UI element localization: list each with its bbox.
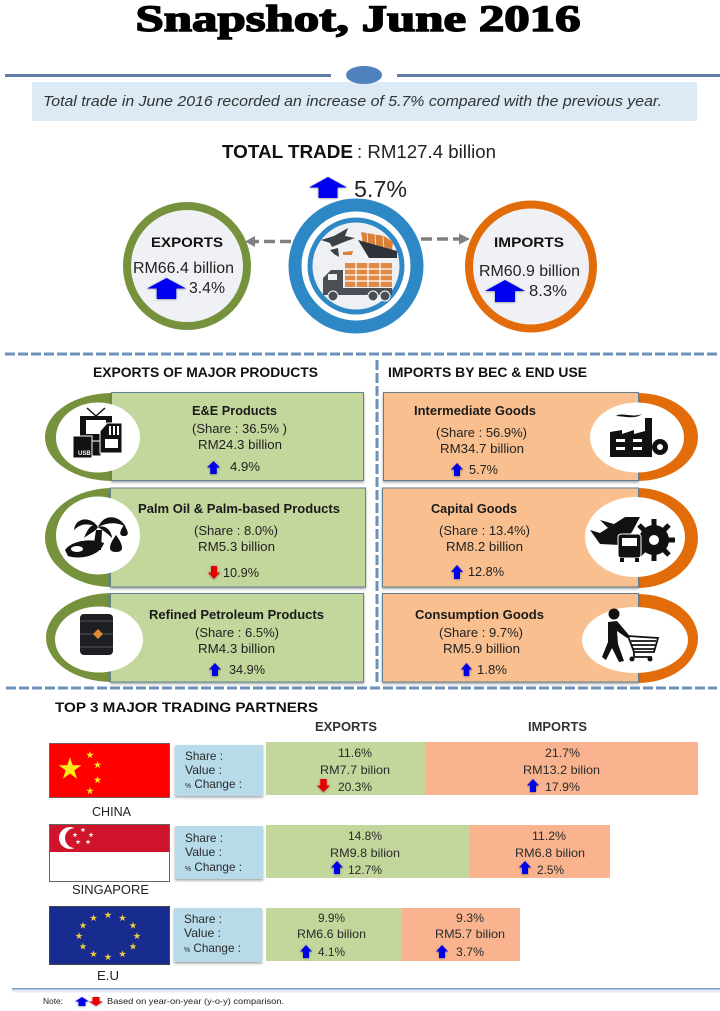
- bar: exports: RM7.7 bilion: [320, 763, 390, 777]
- panel: refined petroleum products: RM4.3 billion: [198, 642, 275, 656]
- note: Note:: [43, 996, 63, 1006]
- note: [43, 996, 284, 1006]
- bar: exports: 20.3%: [338, 780, 372, 794]
- bar: imports: 21.7%: [545, 746, 580, 760]
- bar: exports: 11.6%: [338, 746, 372, 760]
- flag: Singapore: [50, 824, 170, 882]
- exports circle: EXPORTS: [151, 234, 223, 250]
- total trade circle with transport icon: [295, 205, 417, 327]
- panel: refined petroleum products: (Share : 6.5%): [195, 626, 279, 640]
- bar: exports: 12.7%: [348, 863, 382, 877]
- legend box: [175, 745, 263, 796]
- column heading: imports: IMPORTS: [528, 720, 587, 734]
- panel: consumption goods: Consumption Goods: [415, 608, 544, 622]
- panel: palm oil products: Palm Oil & Palm-based Products: [138, 502, 340, 516]
- imports circle: RM60.9 billion: [479, 263, 580, 280]
- summary banner: [32, 82, 697, 121]
- column heading: exports: EXPORTS: [315, 720, 377, 734]
- panel: E&E products: 4.9%: [230, 460, 260, 474]
- legend box: Value :: [184, 926, 221, 940]
- panel: refined petroleum products: Refined Petroleum Products: [149, 608, 324, 622]
- row: E.U: [50, 906, 520, 983]
- icon: plane: [321, 228, 355, 257]
- heading: top 3 trading partners: TOP 3 MAJOR TRADING PARTNERS: [55, 700, 318, 715]
- dashed arrow: to exports: [245, 236, 291, 247]
- legend box: [175, 826, 263, 879]
- legend box: [174, 908, 262, 962]
- heading: exports of major products: EXPORTS OF MAJOR PRODUCTS: [93, 365, 318, 380]
- total trade heading: : RM127.4 billion: [357, 142, 496, 162]
- row: Singapore: [50, 824, 610, 897]
- panel: intermediate goods: RM34.7 billion: [440, 442, 524, 456]
- legend box: Value :: [185, 845, 222, 859]
- panel: E&E products: [45, 392, 364, 481]
- bar: imports: [469, 825, 610, 878]
- legend box: Share :: [185, 831, 223, 845]
- panel: palm oil products: (Share : 8.0%): [194, 524, 278, 538]
- panel: capital goods: [382, 488, 698, 588]
- panel: capital goods: 12.8%: [468, 565, 504, 579]
- bar: imports: 17.9%: [545, 780, 580, 794]
- bar: imports: 9.3%: [456, 911, 484, 925]
- icon: plane, bus and gear: [590, 517, 675, 562]
- row: Singapore: SINGAPORE: [72, 883, 149, 897]
- row: China: [50, 742, 698, 819]
- panel: E&E products: RM24.3 billion: [198, 438, 282, 452]
- panel: consumption goods: (Share : 9.7%): [439, 626, 523, 640]
- bar: imports: [425, 742, 698, 795]
- total trade change: [309, 176, 407, 202]
- panel: capital goods: (Share : 13.4%): [439, 524, 530, 538]
- panel: intermediate goods: Intermediate Goods: [414, 404, 536, 418]
- exports circle: [127, 206, 247, 326]
- bar: imports: 11.2%: [532, 829, 566, 843]
- flag: E.U: [50, 906, 170, 964]
- panel: E&E products: (Share : 36.5% ): [192, 422, 287, 436]
- total trade change: 5.7%: [354, 176, 407, 202]
- panel: E&E products: E&E Products: [192, 404, 277, 418]
- bar: imports: 2.5%: [537, 863, 564, 877]
- title: Snapshot, June 2016: [136, 0, 580, 40]
- icon: ship: [358, 232, 397, 258]
- panel: consumption goods: RM5.9 billion: [443, 642, 520, 656]
- bar: exports: RM9.8 bilion: [330, 846, 400, 860]
- heading: imports by BEC: IMPORTS BY BEC & END USE: [388, 365, 587, 380]
- row: E.U: E.U: [97, 969, 119, 983]
- row: China: CHINA: [92, 805, 132, 819]
- bar: imports: [402, 908, 520, 961]
- icon: electronics: [73, 408, 122, 458]
- total trade heading: TOTAL TRADE: [222, 142, 353, 162]
- bar: imports: RM5.7 bilion: [435, 927, 505, 941]
- note: Based on year-on-year (y-o-y) comparison.: [107, 996, 284, 1006]
- legend box: % Change :: [185, 777, 242, 791]
- icon: oil barrel: [80, 614, 113, 655]
- bar: exports: [266, 908, 402, 961]
- legend box: % Change :: [185, 860, 242, 874]
- bar: imports: RM6.8 bilion: [515, 846, 585, 860]
- bar: imports: RM13.2 bilion: [523, 763, 600, 777]
- flag: China: [50, 744, 170, 798]
- imports circle: IMPORTS: [494, 234, 564, 250]
- icon: factory: [610, 414, 668, 457]
- panel: consumption goods: [382, 594, 698, 683]
- bar: exports: RM6.6 bilion: [297, 927, 366, 941]
- panel: refined petroleum products: 34.9%: [229, 663, 265, 677]
- panel: palm oil products: RM5.3 billion: [198, 540, 275, 554]
- bar: exports: 9.9%: [318, 911, 345, 925]
- panel: palm oil products: [45, 488, 365, 587]
- header divider: [5, 66, 720, 84]
- total trade heading: [222, 142, 496, 162]
- dashed arrow: to imports: [421, 234, 470, 244]
- exports circle: RM66.4 billion: [133, 260, 234, 277]
- panel: palm oil products: 10.9%: [223, 566, 259, 580]
- imports circle: [469, 204, 593, 328]
- panel: capital goods: Capital Goods: [431, 502, 517, 516]
- icon: electronics: USB: [78, 451, 91, 457]
- bar: exports: 14.8%: [348, 829, 382, 843]
- bar: exports: 4.1%: [318, 945, 345, 959]
- imports circle: 8.3%: [529, 283, 567, 300]
- panel: capital goods: RM8.2 billion: [446, 540, 523, 554]
- bar: exports: [266, 825, 469, 878]
- panel: consumption goods: 1.8%: [477, 663, 507, 677]
- icon: person with cart: [602, 608, 658, 662]
- panel: intermediate goods: (Share : 56.9%): [436, 426, 527, 440]
- panel: refined petroleum products: [46, 593, 364, 682]
- legend box: % Change :: [184, 941, 241, 955]
- summary banner: Total trade in June 2016 recorded an increase of 5.7% compared with the previous year.: [43, 93, 662, 110]
- legend box: Value :: [185, 763, 222, 777]
- exports circle: 3.4%: [189, 280, 225, 297]
- legend box: Share :: [185, 749, 223, 763]
- panel: intermediate goods: 5.7%: [469, 463, 498, 477]
- legend box: Share :: [184, 912, 222, 926]
- bar: imports: 3.7%: [456, 945, 484, 959]
- panel: intermediate goods: [384, 392, 698, 481]
- bar: exports: [266, 742, 425, 795]
- icon: palm and oil: [65, 517, 128, 557]
- icon: truck: [323, 263, 392, 301]
